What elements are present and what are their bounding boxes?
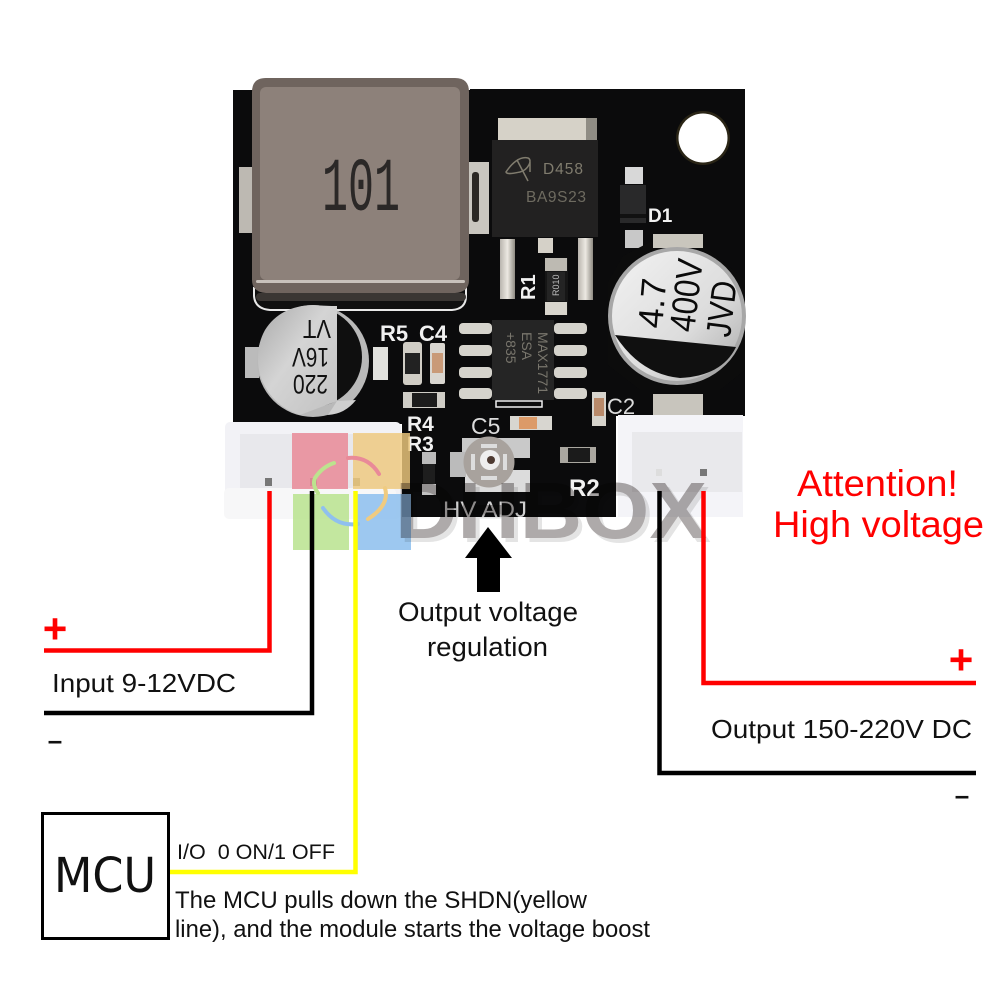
watermark logo DhBox	[292, 433, 711, 559]
capacitor 220 16V: VT	[303, 314, 331, 344]
silkscreen labels: R5	[380, 321, 408, 346]
IC MAX1771: MAX1771	[535, 332, 551, 394]
MOSFET D458: D458	[543, 161, 583, 178]
capacitor 4.7 400V JVD	[608, 234, 746, 390]
input negative black wire	[44, 491, 312, 713]
trimmer potentiometer	[450, 436, 530, 492]
silkscreen labels: R4	[407, 413, 434, 436]
inductor marked 101: 101	[322, 147, 400, 233]
inductor marked 101	[239, 78, 489, 310]
IC MAX1771: ESA	[519, 332, 535, 361]
capacitor 4.7 400V JVD: JVD	[699, 279, 745, 339]
panel: black PCB	[233, 89, 745, 517]
label: IO state: I/O 0 ON/1 OFF	[177, 841, 335, 864]
output negative black wire	[660, 491, 976, 773]
IC MAX1771	[459, 320, 587, 407]
label: input voltage: Input 9-12VDC	[52, 668, 236, 698]
MCU box: MCU	[54, 848, 156, 904]
input positive red wire	[44, 491, 270, 650]
MCU explanation: The MCU pulls down the SHDN(yellow	[175, 887, 588, 914]
MCU explanation: line), and the module starts the voltage boost	[175, 916, 650, 943]
output minus sign: –	[955, 780, 969, 810]
silkscreen labels	[380, 321, 635, 522]
watermark logo DhBox: DHBOX	[395, 466, 707, 555]
MCU box	[42, 814, 168, 938]
SHDN yellow wire	[170, 491, 356, 872]
silkscreen labels: HV ADJ	[443, 497, 527, 522]
silkscreen labels: R3	[407, 433, 434, 456]
diode D1	[620, 167, 673, 248]
high voltage warning	[773, 463, 984, 545]
silkscreen labels: C2	[607, 394, 635, 419]
silkscreen labels: C5	[471, 413, 500, 439]
output plus sign: +	[949, 636, 973, 683]
label: output voltage: Output 150-220V DC	[711, 714, 972, 744]
arrow: output adjustment	[465, 527, 512, 592]
input minus sign: –	[48, 725, 62, 755]
MOSFET D458	[492, 118, 598, 300]
left white connector	[224, 422, 401, 519]
silk label R1 and resistor	[518, 258, 568, 315]
small SMD parts	[403, 342, 703, 495]
capacitor 220 16V: 16V	[292, 342, 329, 372]
high voltage warning: Attention!	[797, 463, 958, 504]
diode D1: D1	[648, 206, 673, 227]
silk label R1 and resistor: R1	[518, 274, 540, 300]
IC MAX1771: +835	[503, 332, 519, 364]
silk label R1 and resistor: R010	[551, 274, 561, 296]
high voltage warning: High voltage	[773, 504, 984, 545]
silkscreen labels: R2	[569, 475, 600, 502]
circuit board module	[224, 78, 746, 522]
capacitor 220 16V: 220	[293, 369, 328, 399]
MCU explanation	[175, 887, 650, 943]
capacitor 220 16V	[245, 305, 388, 417]
right white connector	[618, 415, 743, 517]
watermark logo DhBox: DHBOX	[399, 470, 711, 559]
silkscreen labels: C4	[419, 321, 448, 346]
output positive red wire	[704, 491, 976, 683]
label: output voltage regulation: regulation	[427, 632, 548, 662]
label: output voltage regulation	[398, 597, 578, 662]
capacitor 4.7 400V JVD: 400V	[661, 257, 711, 334]
MOSFET D458: BA9S23	[526, 189, 586, 206]
mounting hole	[676, 111, 730, 165]
input plus sign: +	[43, 605, 67, 652]
capacitor 4.7 400V JVD: 4.7	[631, 276, 674, 330]
label: output voltage regulation: Output voltage	[398, 597, 578, 627]
